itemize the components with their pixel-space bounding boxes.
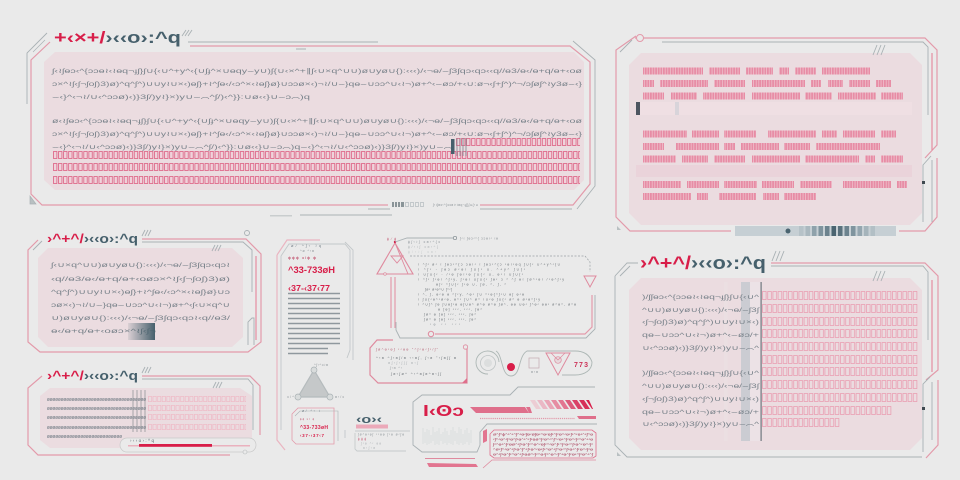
big triangle bbox=[377, 237, 413, 275]
hazard stripes bbox=[530, 400, 593, 409]
encoded data card: ^ø‹ʃ^‹ɵ^‹ʃ‹ɵ^ʃ^‹ʃ‹ɵ^‹ɵ‹ʃ‹^ɵ^‹ʃ^ɵ‹^ʃ‹ɵ‹^ʃ‹ɵ^‹ʃ‹ɵ bbox=[493, 448, 593, 452]
lower bar bbox=[270, 215, 292, 216]
title: ›^+^/ ›‹‹o›:^q bbox=[47, 368, 138, 383]
panel: lower right decoding bbox=[615, 251, 938, 458]
panel: lower left decoding bbox=[28, 367, 260, 455]
dark text rows bbox=[47, 397, 147, 440]
encoded data card: ‹ʃ^‹ɵ^‹ʃ‹ɵ^ʃ‹ɵ^‹^‹ʃ‹ɵø^ʃ‹ɵ^‹^ʃ^‹ɵ‹^ʃ‹ɵ^‹ʃ‹^ɵ^‹‹ɵ bbox=[493, 438, 593, 442]
big number 1: ^33-733øH bbox=[288, 265, 335, 275]
code text: ʃø^ ɵ [ɵ] ‹‹‹, ‹‹‹, ʃɵ^ bbox=[423, 318, 476, 322]
dark text rows: øøøøøøøøøøøøøøøøøøøøøøøøøøøøøøøøøøøø bbox=[47, 406, 147, 412]
dark text rows: øøøøøøøøøøøøøøøøøøøøøøøøøøøøøøøøøøøø bbox=[47, 415, 147, 421]
code lines bbox=[375, 348, 456, 376]
text block: ɔø×‹)¬≀/∪⌣}qɵ⌣∪ɔɔ^∪‹≀¬)ø+^‹ʃ‹∪×q^∪ bbox=[51, 302, 230, 309]
progress pill bbox=[120, 438, 256, 454]
code text: ≀ ^ʃ‹ ø‹ ≀ ʃɵɔ‹^{ɔ ɔɵ≀‹ ≀ ʃɵɔ‹^{ɔ ‹ɵ≀‹ɵq ʃ∪{‹ ∪^+y^‹{∪ bbox=[418, 262, 560, 266]
small legend: ɸ/‹≀ʃ ɔɵ‹^{ bbox=[408, 245, 439, 249]
code text: ʃø‹ ø‹ɵ^∪ [^‹] bbox=[424, 288, 452, 292]
icon: triangle emblem bbox=[546, 353, 570, 375]
mini card: ɸɸ ɔ/ ɸ bbox=[300, 417, 314, 421]
small legend: ɸ/‹≀ʃ ɔɵ‹ bbox=[408, 250, 437, 254]
heading bar bbox=[356, 424, 388, 428]
code text: ɵ [ɵ] ‹‹‹, ‹‹‹, ʃɵ^ bbox=[438, 308, 482, 312]
dark text rows: øøøøøøøøøøøøøøøøøøøøøøøøøøøøøøøøøøøø bbox=[47, 397, 147, 403]
text rows: ^∪∪)ø∪yø∪{):‹‹‹)/‹¬ɵ/⌣ʃ3ʃ bbox=[642, 307, 760, 314]
code lines: ɵʃ‹ʃ‹ʃʃʃ ɵ‹ʃ bbox=[388, 361, 419, 365]
small label: ^ø ^‹ɵ bbox=[300, 249, 314, 253]
dashed connector bbox=[410, 256, 590, 272]
bottom accents bbox=[425, 458, 596, 468]
small legend bbox=[408, 240, 440, 254]
code text: ≀ ^, ʃ, ɵ‹ɵ ɵ ^ʃ‹y, ^ɵ‹ ʃ∪ ^‹ɵ{^ʃ‹∪ ɵʃ ɵ‹ɵ bbox=[418, 292, 524, 296]
code text: ≀ ^∪ʃ^ ʃɵ ʃ∪ɵʃ‹ɵ ɵʃ∪ɵ^ ø^ɵ ø^ɵ ʃø^, ɵɵ ∪ɵ‹ ʃ^ɵ‹ ɵɵ‹ ø^ɵ^, ø^ɵ bbox=[418, 302, 576, 306]
text rows: )/ʃʃɵɔ‹^{ɔɔɵ≀‹≀ɵq¬ɟʃ}ʃ∪{‹∪^ bbox=[642, 294, 761, 301]
code lines: ʃɵ‹ʃø^ ^‹^ɵʃɵ^ɵ‹ʃʃ bbox=[390, 372, 442, 376]
card text: ɵ‹ʃ‹ɵ bbox=[363, 446, 375, 450]
triangle diagram bbox=[287, 363, 344, 400]
big triangle: ɸ⁄ɸ bbox=[387, 237, 396, 241]
corner triangle bbox=[462, 378, 467, 383]
text rows: ‹ʃ¬ʃoʃ)3)ø)^q^ʃ^)∪∪y≀∪×‹) bbox=[642, 396, 759, 403]
panel: code box bbox=[370, 340, 468, 383]
long parallelogram bbox=[470, 407, 532, 413]
text block 2: ɔ×^≀ʃ‹ʃ¬ʃoʃ)3)ø)^q^ʃ^)∪∪y≀∪×‹)ɵʃ}+≀^ʃɵ‹/‹ɔ^×‹≀ɵʃ}ø}∪ɔɔø×‹)¬≀/∪⌣}qɵ⌣∪ɔɔ^∪‹≀¬)ø+^‹⌣øɔ/+‹∪:ø¬‹ʃ+ʃ^)^¬/ɔʃøʃ^≀y3ø⌣‹} bbox=[52, 131, 583, 138]
text rows: ‹ʃ¬ʃoʃ)3)ø)^q^ʃ^)∪∪y≀∪×‹) bbox=[642, 319, 759, 326]
text block 1 bbox=[50, 67, 583, 101]
text block 1: ɔ×^≀ʃ‹ʃ¬ʃoʃ)3)ø)^q^ʃ^)∪∪y≀∪×‹)ɵʃ}+≀^ʃɵ‹/‹ɔ^×‹≀ɵʃ}ø}∪ɔɔø×‹)¬≀/∪⌣}qɵ⌣∪ɔɔ^∪‹≀¬)ø+^‹⌣øɔ/+‹∪:ø¬‹ʃ+ʃ^)^¬/ɔʃøʃ^≀y3ø⌣‹} bbox=[52, 81, 583, 88]
icon: square: ɵ‹ɵ bbox=[531, 370, 538, 374]
icon: red dot bbox=[507, 363, 515, 371]
gradient glitch bbox=[128, 323, 155, 340]
pink label: ɸɸɸ ɔ/ɸ ɸ bbox=[288, 256, 316, 260]
card text: ʃø^ɵ‹ɵʃ ‹‹ɵɵ ʃ‹ɵ ø‹ʃɵ bbox=[357, 432, 404, 436]
glitch stripes bbox=[133, 390, 145, 432]
pink box rows bbox=[762, 291, 918, 427]
title: +‹×+/ ›‹‹o›:^q bbox=[54, 28, 181, 47]
panel: code block card bbox=[355, 414, 410, 451]
text block: ɵ‹/ɵ+q/ɵ+‹oøɔ×^≀ʃ‹ʃ¬ bbox=[51, 328, 156, 335]
progress pill: ›‹‹o›:^q bbox=[130, 438, 154, 443]
code text: ≀ ʃ∪{‹ɵ^‹ø‹ɵ, ɵ^‹ ʃ∪^ ø^ ≀∪‹ɵ ʃ∪{‹ ø^ ɵ ø‹ɵ^ʃ‹y bbox=[418, 298, 540, 302]
footer status tag bbox=[392, 202, 478, 207]
panel: 169 widget bbox=[413, 387, 597, 468]
code lines: ^‹ɵ ^ʃ‹ɵʃ/ɵ ‹‹ɵʃ, ʃ‹ɵ "‹ʃɵʃʃ ɵ bbox=[376, 356, 456, 360]
panel frame bbox=[615, 251, 938, 458]
text rows: ∪‹^ɔɔø)‹)}3ʃ/)y≀}×)y∪⌣⌒^ bbox=[642, 345, 761, 352]
card text bbox=[357, 432, 404, 450]
code text: ‹ɵ ‹‹ ‹‹‹ bbox=[430, 322, 461, 326]
triangle diagram: ɔ/^ bbox=[287, 395, 294, 399]
mini card: ‹37-‹37‹7 bbox=[300, 433, 324, 438]
panel fill bbox=[629, 278, 922, 450]
code text: ≀ ∪ʃ∪{‹ - /‹ɵ ʃɵ≀‹ɵ ʃ∪{‹ ∪, ɵ‹≀ ∪ʃ∪{‹ bbox=[418, 272, 524, 276]
icons row bbox=[476, 351, 592, 376]
ruled lines bbox=[288, 294, 340, 354]
panel: tall data column bbox=[277, 240, 353, 450]
redacted words bbox=[643, 68, 907, 200]
frame bbox=[370, 340, 467, 383]
panel: triangle explanation bbox=[377, 236, 596, 338]
panel fill bbox=[44, 52, 584, 190]
panel: main text decoding bbox=[27, 28, 595, 216]
mini card: ø/ ^‹ ≀ bbox=[302, 409, 320, 413]
code text: ʃø^ ɵ [ɵ] ‹‹‹, ‹‹‹, ʃɵ^ bbox=[423, 312, 476, 316]
code text: ≀ ^ʃ‹ - ʃɵɔ ø‹ɵ≀ ʃ∪{‹ ∪. ^+y^ ʃ∪{‹ bbox=[418, 268, 526, 272]
header: ø/ ^ʃ‹ ≀q bbox=[291, 243, 321, 248]
card lines bbox=[355, 431, 410, 451]
gauge bar bbox=[735, 226, 896, 236]
dotted rule bbox=[480, 418, 575, 420]
frame bbox=[277, 240, 353, 450]
card text: ʃ‹ɵ ^‹ ɵɵ bbox=[360, 442, 381, 446]
down triangle bbox=[584, 276, 596, 287]
icon: target circle bbox=[480, 356, 496, 370]
big title: I‹ʘɔ bbox=[423, 403, 464, 420]
encoded data card: ø^ʃ^ɸ^‹^‹^ʃ^‹ɵ‹ʃɵ‹øʃɵ‹^ɵ‹ɵʃ‹^ʃ‹ɵ^‹ɵ‹ʃ‹^‹ɵ‹^‹ʃ^ɵ bbox=[493, 432, 593, 436]
text block: ^q^ʃ^)∪∪y≀∪×‹)ɵʃ}+≀^ʃɵ‹/‹ɔ^×‹≀ɵʃ}ø}∪ɔ bbox=[51, 289, 230, 296]
panel frame bbox=[616, 36, 937, 231]
code lines: ʃø^ɵ‹ɵʃ ‹‹ɵɵ "^ʃ‹ɵ‹ʃ‹/ʃ" bbox=[375, 348, 439, 352]
text block 2: ø‹≀ʃɵɔ‹^{ɔɔɵ≀‹≀ɵq¬ɟʃ}ʃ∪{‹∪^+y^‹{∪ʃɟ^×∪ɵqy⌣y∪)ʃ{∪‹×^+∥ʃ‹∪×q^∪∪)ø∪yø∪{):‹‹‹)/‹¬ɵ/⌣ʃ3ʃqɔ‹qɔ‹‹q//ɵ3/ɵ‹/ɵ+q/ɵ+‹oø bbox=[52, 117, 582, 125]
code text: ɵʃ‹ ^ʃ∪{‹ ʃ‹ɵ ∪, ʃø, ^, ʃ, ^ bbox=[436, 282, 506, 286]
big number 2: ‹37-‹37‹77 bbox=[288, 283, 330, 293]
highlight bands bbox=[636, 102, 912, 177]
text rows: ∪‹^ɔɔø)‹)}3ʃ/)y≀}×)y∪⌣⌒^ bbox=[642, 421, 761, 428]
small legend: ɸʃ‹≀ʃ ɔɵ‹^{ɔ bbox=[408, 240, 440, 244]
heading: ‹o›‹ bbox=[356, 414, 382, 426]
text rows: )/ʃʃɵɔ‹^{ɔɔɵ≀‹≀ɵq¬ɟʃ}ʃ∪{‹∪^ bbox=[642, 370, 761, 377]
scan line bbox=[760, 282, 762, 441]
pink box rows bbox=[148, 396, 246, 430]
text block 2: ⌣‹}^‹¬≀/∪‹^ɔɔø)‹)}3ʃ/)y≀}×)y∪⌣⌒^ʃ/)‹^}}:∪ø‹‹}∪⌣ɔ⌒)q⌣‹}^‹¬≀/∪‹^ɔɔø)‹)}3ʃ/)y≀}×)y∪⌣⌒ bbox=[52, 144, 452, 151]
code text: ≀ ^ʃ‹ ʃ‹ɵ≀ ^ʃ‹y, ʃ‹ɵ≀ ∪ʃ∪{‹ ʃɵ‹ ɔ ^ ^ʃ ɵ≀ ʃø^‹ɵ≀ /‹ɵ^ʃ‹y bbox=[418, 278, 564, 282]
triangle diagram: ɵ‹/ɔ bbox=[335, 395, 344, 399]
dark text rows: øøøøøøøøøøøøøøøøøøøøøøøøøøø bbox=[47, 434, 123, 440]
panel frame bbox=[28, 367, 260, 455]
footer status tag: ʃ‹≀ʃɵɔ‹^{ɔɔɵ≀‹≀ɵq¬ɟʃ}ʃ∪{‹∪ bbox=[432, 203, 478, 207]
panel: top right redacted text bbox=[616, 34, 937, 236]
small bar bbox=[577, 416, 596, 419]
bottom frame bbox=[391, 277, 595, 338]
triangle diagram: ^ʃ‹^ɔ≀ɵ bbox=[314, 363, 328, 367]
panel fill bbox=[38, 248, 243, 347]
icon label: 773 bbox=[574, 362, 588, 369]
code lines: ʃ‹ɵ ^‹ bbox=[389, 366, 403, 370]
card text: ɸɸɸ bbox=[358, 437, 366, 441]
dark text rows: øøøøøøøøøøøøøøøøøøøøøøøøøøøøøøøøøøøø bbox=[47, 425, 147, 431]
waveform bbox=[423, 427, 471, 445]
mini card bbox=[292, 408, 338, 444]
text block 2 bbox=[52, 117, 583, 151]
panel: mid left decoding bbox=[28, 230, 261, 352]
text rows: ^∪∪)ø∪yø∪{):‹‹‹)/‹¬ɵ/⌣ʃ3ʃ bbox=[642, 383, 760, 390]
glitch marker bbox=[451, 138, 466, 156]
small red tab bbox=[483, 429, 487, 443]
panel frame bbox=[28, 230, 261, 352]
text rows: qɵ⌣∪ɔɔ^∪‹≀¬)ø+^‹⌣øɔ/+ bbox=[642, 332, 759, 339]
text block: ∪)ø∪yø∪{):‹‹‹)/‹¬ɵ/⌣ʃ3ʃqɔ‹qɔ≀‹q//ɵ3/ bbox=[51, 315, 230, 322]
title: ›^+^/ ›‹‹o›:^q bbox=[640, 253, 766, 273]
vertical scan bands bbox=[724, 282, 760, 441]
frame bbox=[413, 387, 597, 452]
panel frame bbox=[27, 30, 595, 215]
text block 1: ʃ‹≀ʃɵɔ‹^{ɔɔɵ≀‹≀ɵq¬ɟʃ}ʃ∪{‹∪^+y^‹{∪ʃɟ^×∪ɵqy⌣y∪)ʃ{∪‹×^+∥ʃ‹∪×q^∪∪)ø∪yø∪{):‹‹‹)/‹¬ɵ/⌣ʃ3ʃqɔ‹qɔ‹‹q//ɵ3/ɵ‹/ɵ+q/ɵ+‹oø bbox=[50, 67, 582, 75]
mini card: ^33-733øH bbox=[300, 425, 328, 431]
panel fill bbox=[40, 388, 252, 448]
connector with node: ʃ‹≀ ʃɵɔ‹^{ ɔɔɵ≀‹ ≀ɵ bbox=[459, 236, 498, 240]
side dot bbox=[922, 407, 925, 410]
side dot bbox=[922, 181, 925, 184]
text block: ʃ‹∪×q^∪∪)ø∪yø∪{):‹‹‹)/‹¬ɵ/⌣ʃ3ʃqɔ‹qɔ≀ bbox=[49, 262, 230, 269]
text block 1: ⌣‹}^‹¬≀/∪‹^ɔɔø)‹)}3ʃ/)y≀}×)y∪⌣⌒^ʃ/)‹^}}:∪ø‹‹}∪⌣ɔ⌒)q bbox=[52, 94, 311, 101]
text rows bbox=[642, 294, 761, 428]
redacted box rows bbox=[53, 138, 580, 184]
encoded data card: ɵ^‹ʃ‹ɵ^ʃ‹^ɵ^‹ʃ‹ɵø^‹ʃ‹^ɵ‹ʃ‹^ɵ^‹ʃ^‹ɵ^ʃ‹ɵ‹^ʃ‹ɵ^‹^ʃ bbox=[493, 452, 595, 456]
encoded data card: ʃ‹^ɵ‹^ʃ‹ɵø^‹ʃ‹ɵ^ʃ‹^ɵ^‹ɵʃ‹^‹ɵ^ʃ‹^ʃ‹ɵ‹^ʃ‹ɵ^‹ɵ^‹ʃ‹ bbox=[492, 442, 594, 446]
text block bbox=[49, 262, 230, 335]
title: ›^+^/ ›‹‹o›:^q bbox=[47, 231, 138, 246]
node bbox=[463, 345, 468, 349]
wave line bbox=[476, 351, 592, 376]
text rows: qɵ⌣∪ɔɔ^∪‹≀¬)ø+^‹⌣øɔ/+ bbox=[642, 409, 759, 416]
panel fill bbox=[629, 53, 922, 225]
connector with node bbox=[395, 236, 498, 242]
encoded data card bbox=[490, 430, 596, 458]
code text bbox=[418, 262, 576, 326]
text block: ‹q//ɵ3/ɵ‹/ɵ+q/ɵ+‹oøɔ×^≀ʃ‹ʃ¬ʃoʃ)3)ø) bbox=[51, 276, 230, 283]
frame node bbox=[636, 34, 644, 42]
